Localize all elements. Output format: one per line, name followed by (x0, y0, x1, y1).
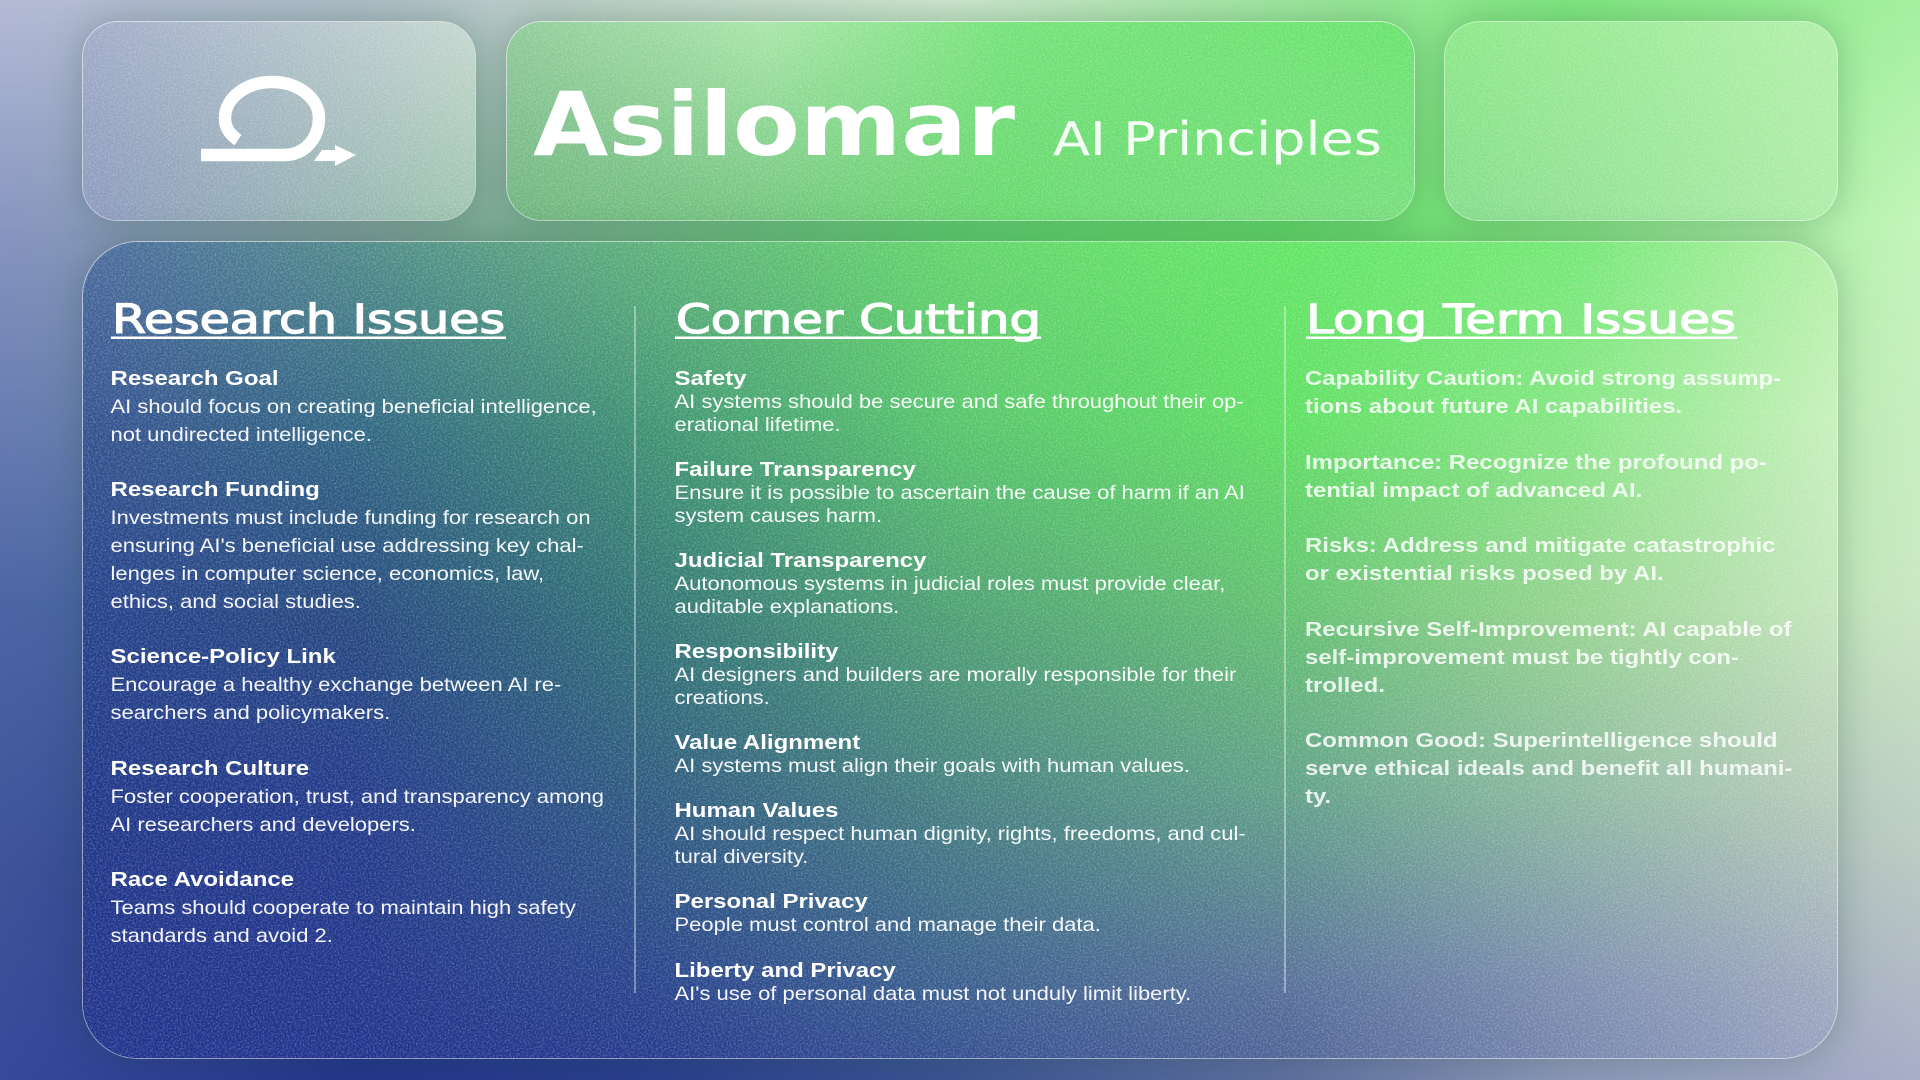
item: recursive self-improvement (1305, 618, 1792, 697)
item: research funding: ensuring AI's beneficial use addressing key chal- (110, 535, 584, 557)
item: research culture: Foster cooperation, trust, and transparency among (110, 786, 604, 808)
item: liberty and privacy: Liberty and Privacy (675, 959, 897, 982)
item: human values (674, 799, 1246, 868)
panel: logo card (82, 21, 476, 221)
icon: loop with arrow (201, 82, 356, 166)
item: judicial transparency: auditable explanations. (675, 596, 899, 618)
heading: corner cutting: Corner Cutting (676, 297, 1041, 343)
title: AI Principles (1053, 112, 1382, 166)
item: common good: ty. (1305, 785, 1331, 808)
item: failure transparency (674, 458, 1245, 527)
item: common good: Common Good: Superintelligence should (1305, 729, 1778, 752)
item: liberty and privacy: AI's use of personal data must not unduly limit liberty. (675, 983, 1191, 1005)
item: science-policy link: Encourage a healthy exchange between AI re- (110, 674, 561, 696)
item: liberty and privacy (674, 959, 1191, 1005)
item: race avoidance: Race Avoidance (110, 868, 294, 891)
item: capability caution (1305, 367, 1781, 418)
item: importance (1305, 451, 1767, 502)
item: responsibility: Responsibility (675, 640, 839, 663)
item: race avoidance: Teams should cooperate to maintain high safety (110, 897, 577, 919)
item: judicial transparency: Judicial Transparency (675, 549, 927, 572)
item: personal privacy (674, 890, 1101, 936)
item: research goal: AI should focus on creating beneficial intelligence, (110, 396, 597, 418)
item: personal privacy: People must control and manage their data. (675, 914, 1101, 936)
item: common good (1305, 729, 1792, 808)
item: research funding: ethics, and social studies. (110, 591, 361, 613)
item: value alignment: Value Alignment (675, 731, 861, 754)
item: research culture: Research Culture (110, 757, 309, 780)
item: safety: erational lifetime. (675, 414, 841, 436)
item: recursive self-improvement: Recursive Self-Improvement: AI capable of (1305, 618, 1792, 641)
item: value alignment (674, 731, 1190, 777)
item: research goal: not undirected intelligence. (110, 424, 372, 446)
item: responsibility: AI designers and builders are morally responsible for their (675, 664, 1236, 686)
divider (634, 306, 636, 993)
item: failure transparency: Ensure it is possible to ascertain the cause of harm if an AI (675, 482, 1245, 504)
item: value alignment: AI systems must align their goals with human values. (675, 755, 1190, 777)
item: research funding (110, 478, 591, 613)
column: research issues (110, 297, 604, 947)
item: capability caution: Capability Caution: Avoid strong assump- (1305, 367, 1781, 390)
item: science-policy link: searchers and policymakers. (110, 702, 390, 724)
item: importance: tential impact of advanced AI. (1305, 479, 1642, 502)
column: corner cutting (674, 297, 1246, 1005)
item: capability caution: tions about future AI capabilities. (1305, 395, 1682, 418)
item: recursive self-improvement: self-improvement must be tightly con- (1305, 646, 1739, 669)
heading: long term issues: Long Term Issues (1306, 297, 1736, 343)
item: judicial transparency (674, 549, 1225, 618)
item: science-policy link: Science-Policy Link (110, 645, 337, 668)
item: research funding: Investments must include funding for research on (110, 507, 591, 529)
item: research funding: Research Funding (110, 478, 320, 501)
title (533, 73, 1382, 176)
panel: title card (506, 21, 1415, 221)
item: race avoidance (110, 868, 577, 947)
column: long term issues (1305, 297, 1792, 808)
panel: main content (82, 241, 1838, 1059)
item: responsibility (674, 640, 1236, 709)
item: research goal (110, 367, 597, 446)
item: safety (674, 367, 1244, 436)
item: responsibility: creations. (675, 687, 770, 709)
item: risks: or existential risks posed by AI. (1305, 562, 1664, 585)
item: risks: Risks: Address and mitigate catastrophic (1305, 534, 1775, 557)
item: safety: Safety (675, 367, 747, 390)
heading: research issues: Research Issues (112, 297, 505, 343)
item: research goal: Research Goal (110, 367, 278, 390)
item: science-policy link (110, 645, 561, 724)
item: research funding: lenges in computer science, economics, law, (110, 563, 544, 585)
item: common good: serve ethical ideals and benefit all humani- (1305, 757, 1792, 780)
item: risks (1305, 534, 1775, 585)
item: human values: Human Values (675, 799, 838, 822)
item: human values: AI should respect human dignity, rights, freedoms, and cul- (675, 823, 1246, 845)
item: importance: Importance: Recognize the profound po- (1305, 451, 1767, 474)
item: research culture: AI researchers and developers. (110, 814, 416, 836)
item: race avoidance: standards and avoid 2. (110, 925, 333, 947)
item: recursive self-improvement: trolled. (1305, 674, 1385, 697)
panel: empty card (1444, 21, 1838, 221)
item: judicial transparency: Autonomous systems in judicial roles must provide clear, (675, 573, 1225, 595)
item: personal privacy: Personal Privacy (675, 890, 869, 913)
item: failure transparency: Failure Transparency (675, 458, 917, 481)
item: human values: tural diversity. (675, 846, 808, 868)
item: research culture (110, 757, 604, 836)
item: safety: AI systems should be secure and safe throughout their op- (675, 391, 1244, 413)
title: Asilomar (533, 73, 1016, 176)
item: failure transparency: system causes harm. (675, 505, 882, 527)
